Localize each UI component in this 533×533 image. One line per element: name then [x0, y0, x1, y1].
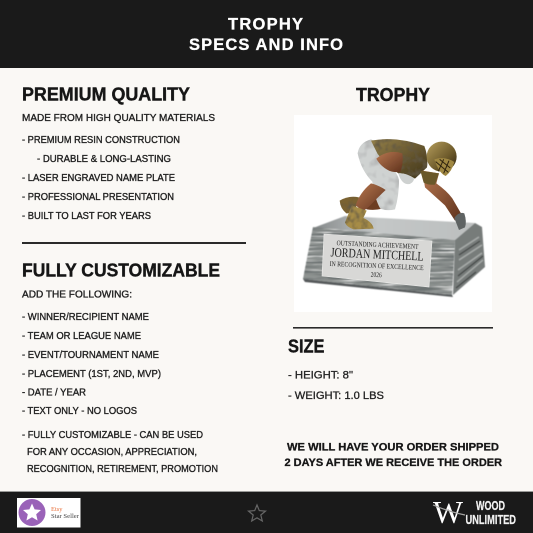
- engraved name plate: OUTSTANDING ACHIEVEMENT: [336, 239, 419, 251]
- engraved name plate: IN RECOGNITION OF EXCELLENCE: [330, 260, 424, 272]
- text block: occasions: FOR ANY OCCASION, APPRECIATION,: [27, 447, 197, 458]
- list: quality features: - BUILT TO LAST FOR YEARS: [22, 211, 151, 222]
- trophy base: [303, 216, 485, 297]
- logo: wood unlimited: WOOD: [476, 499, 505, 513]
- badge: etsy star seller: Star Seller: [51, 513, 80, 520]
- panel: size: [288, 337, 384, 402]
- logo: wood unlimited: W: [433, 494, 464, 530]
- panel: premium quality: [22, 85, 215, 222]
- list: quality features: - PREMIUM RESIN CONSTRUCTION: [22, 135, 180, 146]
- heading: size: SIZE: [288, 337, 324, 357]
- engraved name plate: JORDAN MITCHELL: [330, 244, 424, 264]
- heading: fully customizable: FULLY CUSTOMIZABLE: [22, 261, 220, 281]
- list: customization options: - TEXT ONLY - NO LOGOS: [22, 406, 137, 417]
- logo: wood unlimited: UNLIMITED: [466, 513, 516, 527]
- list: customization options: - DATE / YEAR: [22, 388, 86, 398]
- list: quality features: - LASER ENGRAVED NAME PLATE: [22, 173, 175, 184]
- size specifications: - HEIGHT: 8": [288, 370, 353, 382]
- header title: SPECS AND INFO: [189, 36, 343, 54]
- heading: trophy: TROPHY: [356, 85, 430, 105]
- logo: wood unlimited: [433, 494, 516, 530]
- list: quality features: - PROFESSIONAL PRESENTATION: [22, 192, 174, 203]
- list: quality features: [22, 135, 180, 222]
- header title: TROPHY: [228, 16, 303, 34]
- heading: premium quality: PREMIUM QUALITY: [22, 85, 190, 105]
- header band: [0, 0, 533, 68]
- size specifications: [288, 370, 384, 402]
- header title: [189, 16, 343, 54]
- shipping notice: 2 DAYS AFTER WE RECEIVE THE ORDER: [284, 457, 502, 469]
- shipping notice: [284, 442, 502, 469]
- football player figure: [340, 139, 466, 230]
- list: customization options: - EVENT/TOURNAMENT NAME: [22, 350, 159, 361]
- subheading: add the following: ADD THE FOLLOWING:: [22, 290, 132, 301]
- shipping notice: WE WILL HAVE YOUR ORDER SHIPPED: [287, 442, 499, 454]
- text block: occasions: - FULLY CUSTOMIZABLE - CAN BE USED: [22, 430, 203, 441]
- size specifications: - WEIGHT: 1.0 LBS: [288, 390, 384, 402]
- badge: etsy star seller: Etsy: [51, 506, 63, 513]
- badge: etsy star seller: [17, 498, 80, 528]
- icon: star outline: [248, 505, 266, 521]
- list: customization options: [22, 312, 161, 417]
- list: quality features: - DURABLE & LONG-LASTING: [37, 154, 171, 165]
- trophy photo: [294, 115, 492, 312]
- list: customization options: - WINNER/RECIPIENT NAME: [22, 312, 149, 323]
- panel: fully customizable: [22, 261, 220, 475]
- footer band: [0, 491, 533, 533]
- engraved name plate: [322, 234, 432, 287]
- text block: occasions: RECOGNITION, RETIREMENT, PROMOTION: [27, 464, 218, 475]
- subheading: materials: MADE FROM HIGH QUALITY MATERIALS: [22, 112, 215, 124]
- engraved name plate: 2026: [371, 271, 382, 279]
- list: customization options: - PLACEMENT (1ST, 2ND, MVP): [22, 369, 161, 380]
- text block: occasions: [22, 430, 218, 475]
- list: customization options: - TEAM OR LEAGUE NAME: [22, 331, 141, 342]
